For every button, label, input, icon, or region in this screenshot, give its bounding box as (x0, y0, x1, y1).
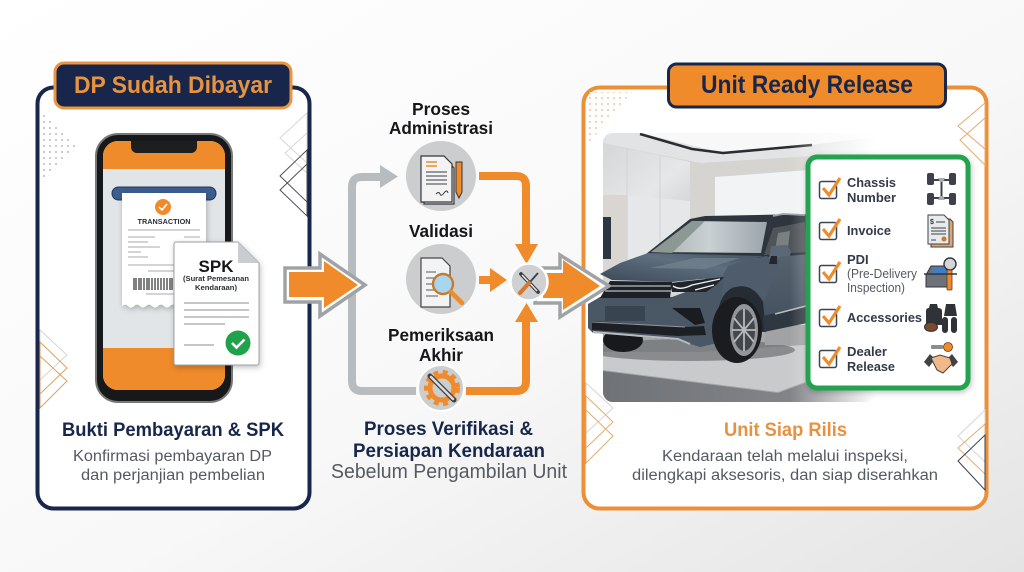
text: process caption: Proses Verifikasi & (364, 418, 533, 440)
text: right description: Kendaraan telah melalui inspeksi, (662, 448, 908, 465)
checklist item: Invoice: Invoice (847, 223, 891, 238)
checklist item: PDI: (Pre-Delivery (847, 267, 918, 281)
roof rail (773, 214, 805, 216)
document: SPK (174, 242, 259, 365)
checklist item: Dealer Release: Dealer (847, 344, 887, 359)
label: Proses Administrasi (389, 99, 493, 138)
text: left description: dan perjanjian pembelian (81, 467, 265, 484)
text: right description (632, 448, 938, 484)
plate area (605, 306, 645, 321)
arrow: into release (535, 255, 609, 317)
text: process caption: Sebelum Pengambilan Unit (331, 461, 567, 483)
windshield (651, 221, 767, 253)
checklist item: Accessories (820, 304, 957, 333)
text: process caption (331, 418, 567, 483)
label: Pemeriksaan Akhir (388, 325, 494, 365)
checklist item: Dealer Release (820, 342, 958, 374)
photo: grey SUV in showroom (585, 133, 876, 403)
text: process caption: Persiapan Kendaraan (353, 440, 545, 462)
checklist item: Invoice: $ (930, 219, 934, 226)
wheel arch (717, 286, 766, 332)
checklist item: Invoice (820, 215, 953, 247)
receipt: TRANSACTION (138, 217, 190, 226)
checklist item: PDI: PDI (847, 252, 869, 267)
checklist item: Chassis Number: Number (847, 190, 896, 205)
car (588, 214, 812, 363)
fender (700, 256, 780, 347)
air intake (672, 308, 705, 325)
headlight (670, 277, 724, 292)
far front wheel (603, 328, 643, 352)
label: Proses Administrasi: Proses (412, 99, 470, 119)
bumper (588, 278, 724, 347)
icon: document and magnifier (406, 244, 476, 314)
panel: process flow (331, 99, 567, 483)
mirror (769, 245, 791, 258)
floor (603, 332, 806, 402)
arrow: gray flow line (352, 165, 416, 391)
document: SPK: Kendaraan) (195, 283, 238, 292)
checklist item: PDI: Inspection) (847, 281, 905, 295)
icon: tools hub (510, 264, 548, 300)
text: left description: Konfirmasi pembayaran DP (73, 448, 272, 465)
header: DP Sudah Dibayar: DP Sudah Dibayar (74, 72, 272, 99)
checklist item: Chassis Number (820, 173, 956, 205)
body side (690, 250, 812, 343)
side sill (763, 304, 812, 332)
silver lip (593, 332, 690, 344)
panel: DP Sudah Dibayar (38, 63, 310, 508)
icon: documents and pen (406, 141, 476, 211)
panel frame: right (584, 88, 986, 508)
label: Proses Administrasi: Administrasi (389, 118, 493, 138)
decoration: left panel patterns (40, 110, 307, 408)
decoration: right panel patterns (586, 92, 985, 490)
arrow: orange top line (479, 176, 538, 264)
roof and frame (646, 214, 812, 258)
text: left description (73, 448, 272, 484)
arrow: into process (285, 254, 365, 316)
label: Pemeriksaan Akhir: Pemeriksaan (388, 325, 494, 345)
panel frame: left (38, 88, 310, 508)
side window (764, 222, 806, 255)
heading: Bukti Pembayaran & SPK: Bukti Pembayaran & SPK (62, 419, 284, 441)
header: DP Sudah Dibayar (55, 63, 291, 108)
checklist item: Accessories: Accessories (847, 310, 922, 325)
panel: Unit Ready Release (584, 64, 986, 508)
checklist item: Chassis Number: Chassis (847, 175, 896, 190)
rim (730, 304, 758, 356)
illustration: phone with receipt (96, 134, 259, 402)
hood (600, 253, 764, 282)
header: Unit Ready Release: Unit Ready Release (701, 71, 913, 99)
tire (712, 297, 762, 363)
grille (600, 281, 672, 298)
showroom interior (585, 133, 875, 402)
header: Unit Ready Release (668, 64, 946, 107)
lower intake (592, 321, 706, 336)
document: SPK: SPK (199, 257, 234, 276)
label: Validasi: Validasi (409, 221, 473, 241)
text: right description: dilengkapi aksesoris, dan siap diserahkan (632, 467, 938, 484)
arrow: orange middle (479, 268, 507, 292)
heading: Unit Siap Rilis: Unit Siap Rilis (724, 420, 847, 441)
checklist item: Dealer Release: Release (847, 359, 895, 374)
receipt (122, 193, 206, 308)
document: SPK: (Surat Pemesanan (183, 274, 249, 283)
icon: gear and wrench (418, 365, 464, 411)
chrome line (592, 322, 685, 327)
label: Pemeriksaan Akhir: Akhir (419, 345, 463, 365)
arrow: orange bottom line (466, 303, 538, 391)
checklist item: PDI (820, 252, 957, 295)
checklist panel (808, 157, 968, 388)
